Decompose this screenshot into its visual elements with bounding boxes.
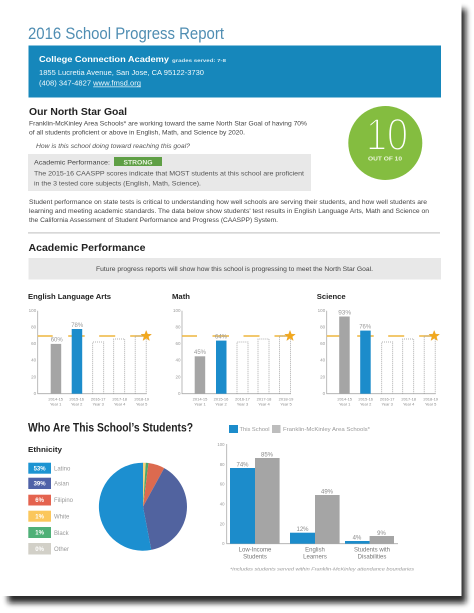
intro paragraph bbox=[29, 199, 430, 224]
chart: English Language Arts: Year 5 bbox=[136, 402, 148, 406]
chart: Science: 0 bbox=[323, 391, 326, 396]
bar chart: student groups: 12% bbox=[296, 527, 309, 533]
bar chart: student groups: 85% bbox=[261, 452, 274, 458]
ethnicity legend: 53% bbox=[34, 466, 46, 472]
chart: English Language Arts bbox=[28, 292, 151, 406]
chart: Math: 0 bbox=[178, 391, 181, 396]
heading: Ethnicity: Ethnicity bbox=[28, 445, 63, 454]
bar chart: student groups: 4% bbox=[353, 536, 362, 542]
chart: English Language Arts: 2017-18 bbox=[112, 396, 128, 402]
bar chart: student groups: Students with bbox=[354, 548, 390, 554]
chart: Science: Year 5 bbox=[425, 402, 437, 406]
chart: Math: 2015-16 bbox=[214, 396, 229, 402]
chart: Math: 2017-18 bbox=[257, 396, 272, 402]
bar chart: student groups: 100 bbox=[217, 442, 225, 447]
ethnicity legend: Filipino bbox=[54, 498, 74, 504]
title: 2016 School Progress Report bbox=[28, 24, 224, 43]
school info banner bbox=[28, 46, 441, 98]
chart: English Language Arts: Year 4 bbox=[114, 402, 126, 406]
bar chart: student groups: 49% bbox=[321, 490, 334, 496]
ethnicity legend: Latino bbox=[54, 466, 71, 472]
school info banner: grades served: 7-8 bbox=[172, 58, 227, 63]
chart: Science: Year 3 bbox=[381, 402, 394, 406]
chart: English Language Arts: English Language Arts bbox=[28, 292, 111, 301]
chart: Science: 76% bbox=[359, 324, 372, 331]
chart: Math: 60 bbox=[175, 341, 181, 346]
chart: English Language Arts: 100 bbox=[29, 308, 37, 313]
chart: English Language Arts: 60 bbox=[31, 341, 37, 346]
goal description: Franklin-McKinley Area Schools* are working toward the same North Star Goal of having 70% bbox=[29, 120, 307, 128]
score badge: 10 bbox=[366, 109, 408, 160]
goal description bbox=[29, 120, 307, 136]
intro paragraph: Student performance on state tests is critical to understanding how well schools are serving their students, and how well students are bbox=[29, 199, 428, 206]
bar chart: student groups: 40 bbox=[220, 502, 225, 506]
bar chart: student groups: English bbox=[305, 548, 325, 554]
chart: Science: 2015-16 bbox=[358, 396, 374, 402]
italic question: How is this school doing toward reaching this goal? bbox=[36, 143, 191, 150]
bar chart: student groups: 60 bbox=[220, 482, 225, 486]
chart: Math: 20 bbox=[175, 374, 181, 379]
notice bar: Future progress reports will show how this school is progressing to meet the North Star Goal. bbox=[96, 266, 373, 273]
chart: Science: 60 bbox=[320, 341, 326, 346]
bar chart: student groups: 20 bbox=[220, 522, 225, 526]
chart: Science: 80 bbox=[320, 324, 326, 330]
heading: Our North Star Goal: Our North Star Goal bbox=[29, 107, 127, 118]
legend: school vs area bbox=[229, 425, 370, 433]
chart: English Language Arts: 2016-17 bbox=[91, 396, 106, 402]
bar chart: student groups: 0 bbox=[222, 541, 225, 546]
chart: English Language Arts: 80 bbox=[31, 324, 37, 330]
chart: Science: 93% bbox=[338, 310, 352, 316]
panel: academic performance rating: The 2015-16 CAASPP scores indicate that MOST students at this school are proficient bbox=[34, 170, 304, 178]
chart: Math: 40 bbox=[175, 358, 181, 363]
ethnicity legend: 6% bbox=[35, 498, 45, 504]
panel: academic performance rating: Academic Performance: bbox=[34, 160, 110, 166]
bar chart: student groups: Students bbox=[243, 554, 267, 560]
chart: English Language Arts: 2018-19 bbox=[134, 396, 150, 402]
ethnicity legend: 39% bbox=[34, 482, 46, 488]
pie chart: ethnicity bbox=[99, 463, 187, 551]
bar chart: student groups: 80 bbox=[220, 462, 225, 467]
legend: school vs area: Franklin-McKinley Area Schools* bbox=[283, 427, 370, 433]
bar chart: student groups: Learners bbox=[303, 554, 327, 560]
bar chart: student groups: 9% bbox=[377, 531, 387, 537]
panel: academic performance rating: STRONG bbox=[124, 159, 153, 166]
chart: Science: Year 1 bbox=[339, 402, 351, 406]
intro paragraph: the California Assessment of Student Performance and Progress (CAASPP) System. bbox=[29, 217, 278, 224]
chart: Math: Year 5 bbox=[280, 402, 292, 406]
chart: English Language Arts: 40 bbox=[31, 358, 37, 363]
ethnicity legend: White bbox=[54, 514, 70, 520]
chart: Science: 2014-15 bbox=[337, 396, 353, 402]
chart: Science: 2017-18 bbox=[401, 396, 417, 402]
ethnicity legend: Other bbox=[54, 547, 69, 553]
chart: Math: Year 1 bbox=[194, 402, 206, 406]
chart: Math: Year 4 bbox=[258, 402, 270, 406]
panel: academic performance rating: in the 3 tested core subjects (English, Math, Science). bbox=[34, 180, 201, 188]
chart: English Language Arts: 60% bbox=[51, 336, 63, 344]
chart: Science: 20 bbox=[320, 374, 326, 379]
school info banner: College Connection Academy bbox=[39, 54, 169, 64]
chart: English Language Arts: 2015-16 bbox=[69, 396, 85, 402]
ethnicity legend: 1% bbox=[35, 530, 45, 536]
chart: Science: 40 bbox=[320, 358, 326, 363]
legend: school vs area: This School bbox=[240, 427, 270, 433]
chart: Science: 2018-19 bbox=[423, 396, 439, 402]
notice bar bbox=[28, 258, 441, 280]
chart: Science: Year 4 bbox=[403, 402, 415, 406]
ethnicity legend: Black bbox=[54, 531, 70, 537]
heading: Academic Performance: Academic Performance bbox=[28, 243, 146, 254]
chart: Math: 45% bbox=[194, 349, 206, 356]
heading: Who Are This School's Students?: Who Are This School’s Students? bbox=[28, 422, 193, 434]
chart: Science: 2016-17 bbox=[380, 396, 395, 402]
chart: Science: 100 bbox=[318, 308, 326, 313]
chart: English Language Arts: 20 bbox=[31, 374, 37, 379]
ethnicity legend bbox=[28, 463, 74, 554]
school info banner: (408) 347-4827 www.fmsd.org bbox=[39, 80, 141, 88]
goal description: of all students proficient or above in English, Math, and Science by 2020. bbox=[29, 130, 245, 136]
chart: Math: 2016-17 bbox=[235, 396, 251, 402]
chart: Math: Math bbox=[172, 292, 190, 301]
chart: Math: 2014-15 bbox=[193, 396, 208, 402]
ethnicity legend: 0% bbox=[35, 547, 45, 553]
report content bbox=[28, 24, 441, 572]
chart: English Language Arts: 2014-15 bbox=[48, 396, 64, 402]
intro paragraph: learning and meeting academic standards. The data below show students' test results in English Language Arts, Math and Science on bbox=[29, 208, 430, 215]
score badge: OUT OF 10 bbox=[368, 156, 402, 162]
panel: academic performance rating bbox=[28, 154, 311, 191]
bar chart: student groups: 74% bbox=[236, 462, 249, 468]
chart: Math: 64% bbox=[215, 334, 227, 340]
chart: English Language Arts: 0 bbox=[34, 391, 37, 396]
chart: English Language Arts: Year 2 bbox=[71, 402, 83, 406]
bar chart: student groups: Low-Income bbox=[239, 548, 272, 554]
chart: Math: 80 bbox=[175, 324, 181, 330]
chart: Math: 100 bbox=[173, 308, 181, 313]
chart: English Language Arts: 78% bbox=[71, 322, 84, 329]
chart: Math: Year 3 bbox=[237, 402, 249, 406]
chart: Math bbox=[172, 292, 295, 406]
school info banner: 1855 Lucretia Avenue, San Jose, CA 95122-3730 bbox=[39, 70, 204, 77]
chart: Science: Year 2 bbox=[360, 402, 372, 406]
chart: English Language Arts: Year 3 bbox=[92, 402, 105, 406]
bar chart: student groups bbox=[217, 442, 398, 560]
score badge bbox=[348, 106, 422, 180]
footnote: *Includes students served within Franklin-McKinley attendance boundaries bbox=[230, 566, 415, 572]
chart: Math: Year 2 bbox=[215, 402, 227, 406]
ethnicity legend: 1% bbox=[35, 514, 45, 520]
chart: Science: Science bbox=[317, 292, 346, 301]
chart: English Language Arts: Year 1 bbox=[50, 402, 62, 406]
bar chart: student groups: Disabilities bbox=[358, 554, 386, 560]
chart: Math: 2018-19 bbox=[279, 396, 294, 402]
chart: Science bbox=[317, 292, 439, 406]
ethnicity legend: Asian bbox=[54, 482, 69, 488]
